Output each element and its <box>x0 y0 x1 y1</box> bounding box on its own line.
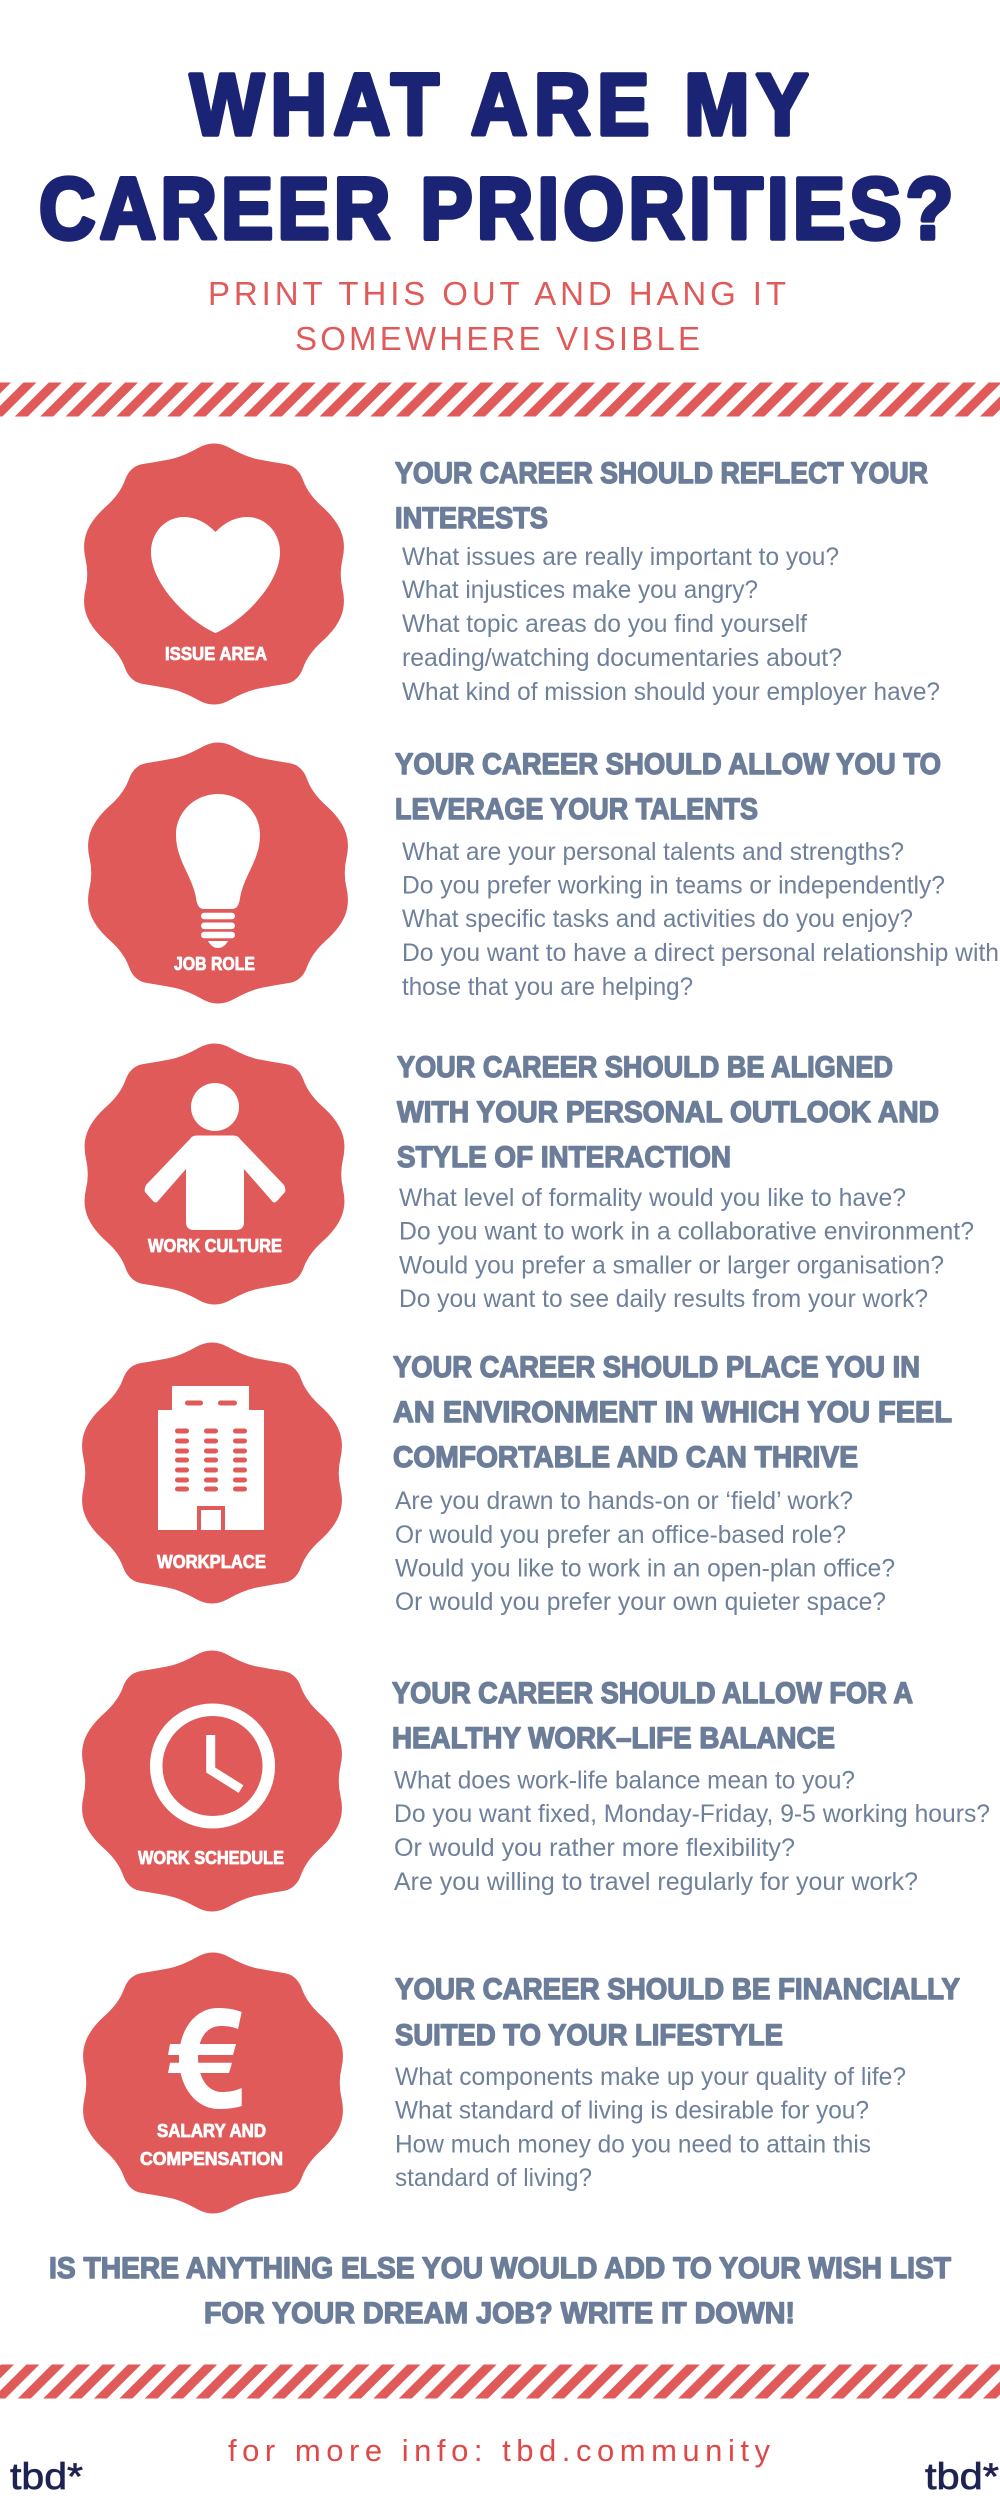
questions: standard of living? <box>395 2164 592 2192</box>
badge shape <box>85 1044 344 1304</box>
questions: What components make up your quality of life? <box>395 2063 906 2091</box>
badge shape <box>83 1952 343 2214</box>
heading <box>395 457 928 535</box>
bottom striped band <box>0 2364 1000 2398</box>
questions <box>394 1766 990 1896</box>
badge shape <box>84 444 344 704</box>
icon: office building <box>158 1386 264 1530</box>
heading: YOUR CAREER SHOULD ALLOW YOU TO <box>395 748 941 781</box>
questions: Do you want fixed, Monday-Friday, 9-5 working hours? <box>394 1800 990 1828</box>
panel: work-life balance <box>82 1650 990 1912</box>
questions: Do you want to work in a collaborative environment? <box>399 1218 974 1246</box>
badge: work culture <box>85 1044 344 1304</box>
badge: workplace <box>82 1342 342 1604</box>
badge label: JOB ROLE <box>174 954 255 974</box>
badge label: WORK CULTURE <box>148 1236 282 1256</box>
heading: LEVERAGE YOUR TALENTS <box>395 793 758 826</box>
heading <box>395 748 941 826</box>
badge label: ISSUE AREA <box>165 644 267 664</box>
badge label: COMPENSATION <box>140 2149 283 2169</box>
heading <box>392 1677 913 1755</box>
questions: Are you willing to travel regularly for your work? <box>394 1868 918 1896</box>
questions: What level of formality would you like to have? <box>399 1184 906 1212</box>
questions: Do you want to have a direct personal relationship with <box>402 939 999 967</box>
panel: salary <box>83 1952 960 2214</box>
questions: Do you want to see daily results from your work? <box>399 1285 928 1313</box>
title <box>39 56 953 257</box>
heading: STYLE OF INTERACTION <box>397 1141 731 1174</box>
panel: workplace <box>82 1342 952 1616</box>
questions: Do you prefer working in teams or independently? <box>402 872 945 900</box>
questions <box>395 2063 906 2192</box>
badge: salary and compensation <box>83 1952 343 2214</box>
closing call to action: FOR YOUR DREAM JOB? WRITE IT DOWN! <box>204 2297 795 2330</box>
panel: work culture <box>85 1044 974 1313</box>
questions: Would you prefer a smaller or larger organisation? <box>399 1252 944 1280</box>
closing call to action: IS THERE ANYTHING ELSE YOU WOULD ADD TO YOUR WISH LIST <box>49 2252 951 2285</box>
questions: reading/watching documentaries about? <box>402 644 842 672</box>
title: CAREER PRIORITIES? <box>39 160 953 257</box>
heading: YOUR CAREER SHOULD PLACE YOU IN <box>393 1351 920 1384</box>
heading: YOUR CAREER SHOULD REFLECT YOUR <box>395 457 928 490</box>
questions: How much money do you need to attain this <box>395 2130 871 2158</box>
heading <box>397 1051 939 1174</box>
title: WHAT ARE MY <box>190 56 808 153</box>
questions: What standard of living is desirable for you? <box>395 2097 869 2125</box>
subtitle <box>208 275 786 357</box>
icon: euro sign <box>168 2008 242 2109</box>
icon: clock <box>156 1710 269 1822</box>
questions: Or would you rather more flexibility? <box>394 1834 795 1862</box>
top striped band <box>0 382 1000 416</box>
badge shape <box>82 1342 342 1604</box>
badge shape <box>82 1650 342 1912</box>
badge shape <box>88 742 348 1004</box>
questions <box>402 543 940 706</box>
badge: job role <box>88 742 348 1004</box>
icon: light bulb <box>176 794 260 948</box>
questions: What specific tasks and activities do you enjoy? <box>402 905 913 933</box>
subtitle: PRINT THIS OUT AND HANG IT <box>208 275 786 312</box>
questions <box>399 1184 974 1313</box>
questions: What topic areas do you find yourself <box>402 610 807 638</box>
icon: heart <box>151 517 280 633</box>
heading: AN ENVIRONMENT IN WHICH YOU FEEL <box>393 1396 952 1429</box>
logo: right: tbd* <box>925 2456 999 2497</box>
questions: Would you like to work in an open-plan office? <box>395 1554 895 1582</box>
heading: SUITED TO YOUR LIFESTYLE <box>395 2019 783 2052</box>
questions <box>395 1487 895 1616</box>
heading: WITH YOUR PERSONAL OUTLOOK AND <box>397 1096 939 1129</box>
questions: What are your personal talents and strengths? <box>402 838 904 866</box>
questions: Are you drawn to hands-on or ‘field’ work? <box>395 1487 853 1515</box>
icon: person <box>145 1083 285 1230</box>
questions: Or would you prefer an office-based role? <box>395 1521 846 1549</box>
panel: talents <box>88 742 999 1004</box>
badge: work schedule <box>82 1650 342 1912</box>
heading: YOUR CAREER SHOULD ALLOW FOR A <box>392 1677 913 1710</box>
questions: Or would you prefer your own quieter space? <box>395 1588 886 1616</box>
heading: INTERESTS <box>395 502 548 535</box>
heading <box>393 1351 952 1474</box>
heading <box>395 1973 960 2052</box>
questions: What does work-life balance mean to you? <box>394 1766 855 1794</box>
questions: What injustices make you angry? <box>402 576 758 604</box>
badge label: WORKPLACE <box>157 1552 266 1572</box>
logo: left: tbd* <box>10 2456 83 2497</box>
footer link text: for more info: tbd.community <box>228 2433 770 2468</box>
badge label: WORK SCHEDULE <box>138 1848 284 1868</box>
badge label: SALARY AND <box>157 2121 266 2141</box>
subtitle: SOMEWHERE VISIBLE <box>295 320 700 357</box>
panel: interests <box>84 444 940 706</box>
heading: COMFORTABLE AND CAN THRIVE <box>393 1441 858 1474</box>
heading: YOUR CAREER SHOULD BE ALIGNED <box>397 1051 893 1084</box>
heading: HEALTHY WORK–LIFE BALANCE <box>392 1722 835 1755</box>
questions: those that you are helping? <box>402 973 693 1001</box>
badge label <box>140 2121 283 2169</box>
closing call to action <box>49 2252 951 2330</box>
badge: issue area <box>84 444 344 704</box>
questions <box>402 838 999 1001</box>
heading: YOUR CAREER SHOULD BE FINANCIALLY <box>395 1973 960 2006</box>
questions: What issues are really important to you? <box>402 543 839 571</box>
questions: What kind of mission should your employer have? <box>402 678 940 706</box>
